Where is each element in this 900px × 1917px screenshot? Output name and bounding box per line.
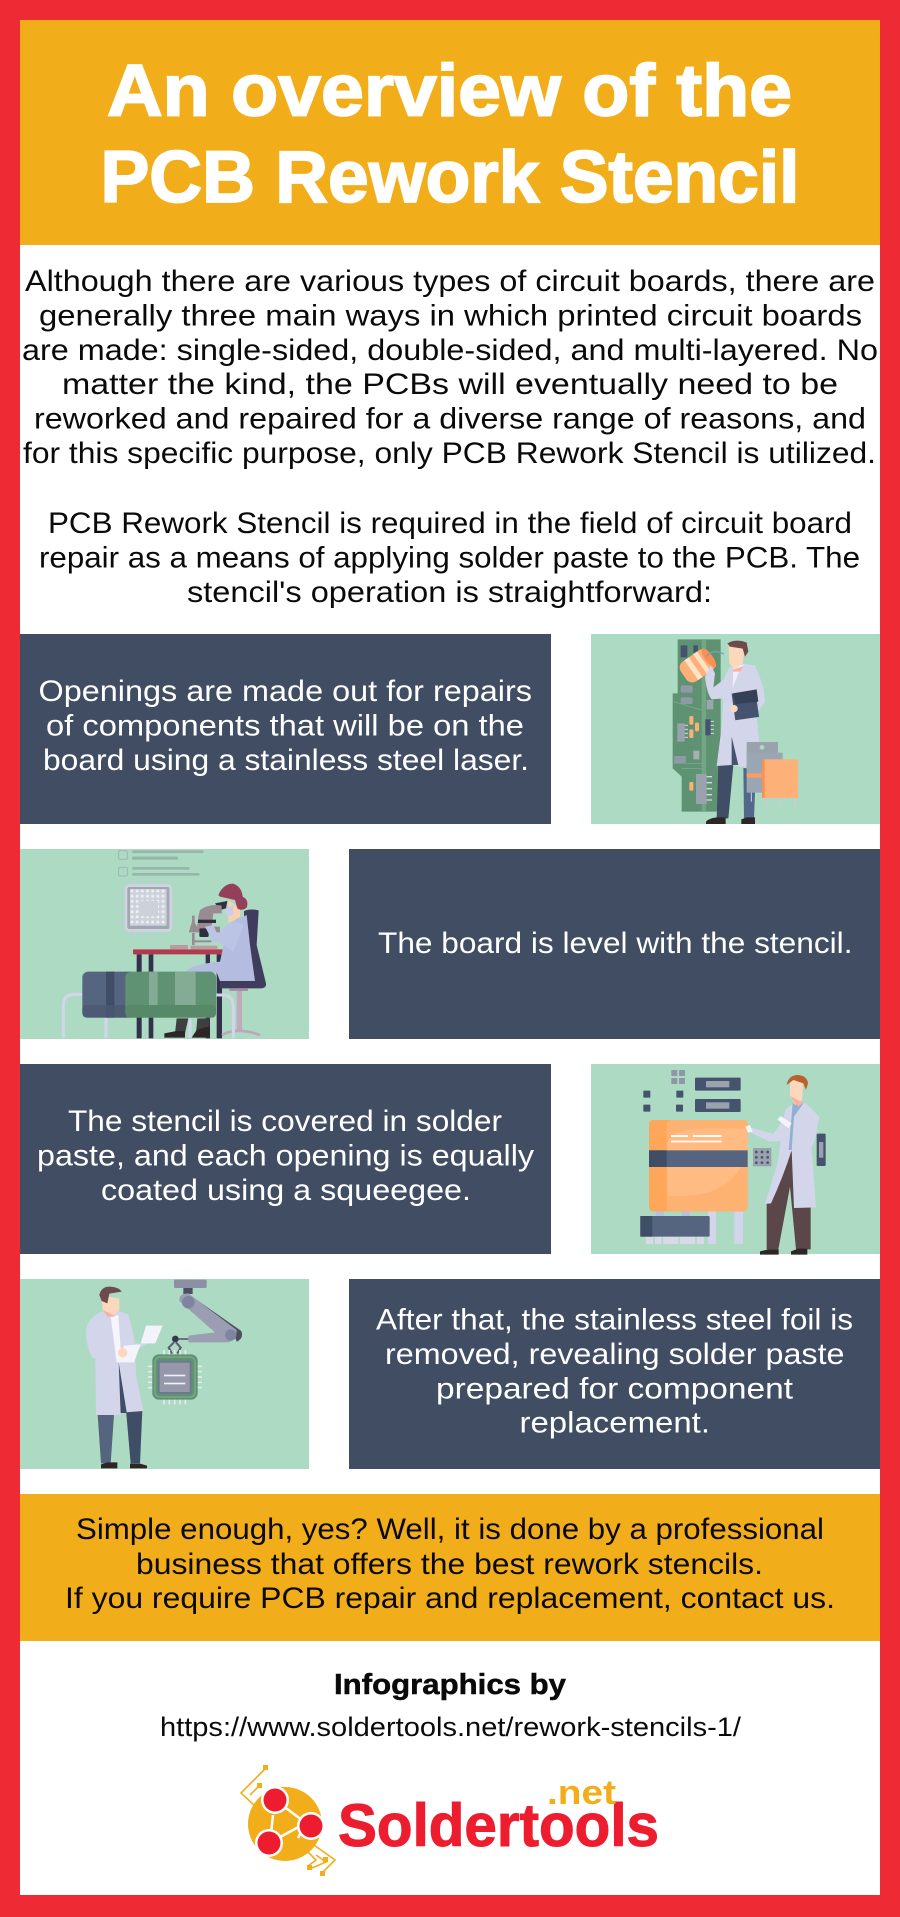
logo icon bbox=[241, 1765, 335, 1876]
intro paragraph 1: Although there are various types of circuit boards, there are bbox=[25, 265, 875, 298]
orange machine bbox=[649, 1120, 748, 1211]
panel: step 3 text: The stencil is covered in solder bbox=[68, 1105, 502, 1138]
base unit bbox=[640, 1216, 710, 1237]
closing call-to-action banner: business that offers the best rework stencils. bbox=[136, 1548, 763, 1581]
illustration: engineer with orange machine bbox=[591, 1064, 880, 1255]
panel: step 4 text: removed, revealing solder paste bbox=[385, 1338, 844, 1371]
engineer bbox=[767, 1150, 811, 1249]
intro paragraph 2: repair as a means of applying solder paste to the PCB. The bbox=[39, 542, 860, 574]
capacitor bbox=[677, 646, 719, 685]
checklist bbox=[119, 851, 127, 876]
panel: step 1 text: board using a stainless steel laser. bbox=[43, 744, 529, 777]
chip bbox=[148, 1350, 202, 1404]
intro paragraph 1: for this specific purpose, only PCB Rework Stencil is utilized. bbox=[23, 437, 876, 470]
table bbox=[137, 954, 142, 1038]
panel: step 2 text: The board is level with the stencil. bbox=[378, 927, 852, 960]
intro paragraph 2 bbox=[39, 507, 860, 609]
logo: Soldertools.net bbox=[241, 1765, 659, 1876]
intro paragraph 2: PCB Rework Stencil is required in the field of circuit board bbox=[48, 507, 852, 540]
intro paragraph 1: reworked and repaired for a diverse range of reasons, and bbox=[34, 403, 866, 436]
panel: step 4 text: After that, the stainless steel foil is bbox=[376, 1303, 853, 1336]
illustration: scientist at microscope bbox=[20, 849, 309, 1039]
closing call-to-action banner: If you require PCB repair and replacement, contact us. bbox=[65, 1582, 835, 1615]
panel: step 3 text bbox=[20, 1064, 551, 1254]
logo .net: .net bbox=[547, 1774, 616, 1812]
intro paragraph 1: are made: single-sided, double-sided, and multi-layered. No bbox=[22, 334, 878, 367]
intro paragraph 2: stencil's operation is straightforward: bbox=[187, 576, 712, 609]
panel: step 4 text: replacement. bbox=[520, 1407, 710, 1440]
chips bbox=[671, 1070, 685, 1084]
panel: step 2 text bbox=[349, 849, 880, 1039]
keypad bbox=[753, 1148, 771, 1166]
closing call-to-action banner: Simple enough, yes? Well, it is done by a professional bbox=[76, 1513, 824, 1546]
panel: step 1 text bbox=[20, 634, 551, 824]
panel: step 4 text: prepared for component bbox=[436, 1372, 794, 1405]
microchip bbox=[119, 878, 177, 937]
chair bbox=[220, 909, 266, 988]
panel: step 4 text bbox=[349, 1279, 880, 1469]
title line 2: PCB Rework Stencil bbox=[100, 137, 800, 218]
credit url: https://www.soldertools.net/rework-stencils-1/ bbox=[160, 1712, 742, 1742]
illustration: technician with circuit board bbox=[591, 634, 880, 824]
robot arm bbox=[174, 1280, 207, 1288]
machine legs bbox=[656, 1210, 664, 1244]
intro paragraph 1 bbox=[22, 265, 878, 470]
scientist bbox=[187, 915, 255, 981]
engineer bbox=[98, 1415, 114, 1463]
relay components bbox=[747, 742, 778, 755]
title banner bbox=[20, 20, 880, 245]
bench stools bbox=[63, 994, 87, 1038]
logo wordmark: Soldertools bbox=[338, 1792, 659, 1859]
panel: step 1 text: of components that will be on the bbox=[46, 709, 524, 742]
panel: step 3 text: coated using a squeegee. bbox=[101, 1174, 471, 1207]
credit heading: Infographics by bbox=[334, 1669, 566, 1701]
microscope bbox=[197, 905, 222, 932]
intro paragraph 1: matter the kind, the PCBs will eventually need to be bbox=[62, 368, 838, 401]
panel: step 3 text: paste, and each opening is equally bbox=[37, 1139, 534, 1172]
man bbox=[717, 765, 733, 818]
intro paragraph 1: generally three main ways in which printed circuit boards bbox=[39, 299, 862, 332]
illustration: engineer with robot arm and chip bbox=[20, 1279, 309, 1469]
panel: step 1 text: Openings are made out for repairs bbox=[38, 675, 532, 708]
closing call-to-action banner bbox=[20, 1494, 880, 1641]
title line 1: An overview of the bbox=[107, 50, 792, 132]
